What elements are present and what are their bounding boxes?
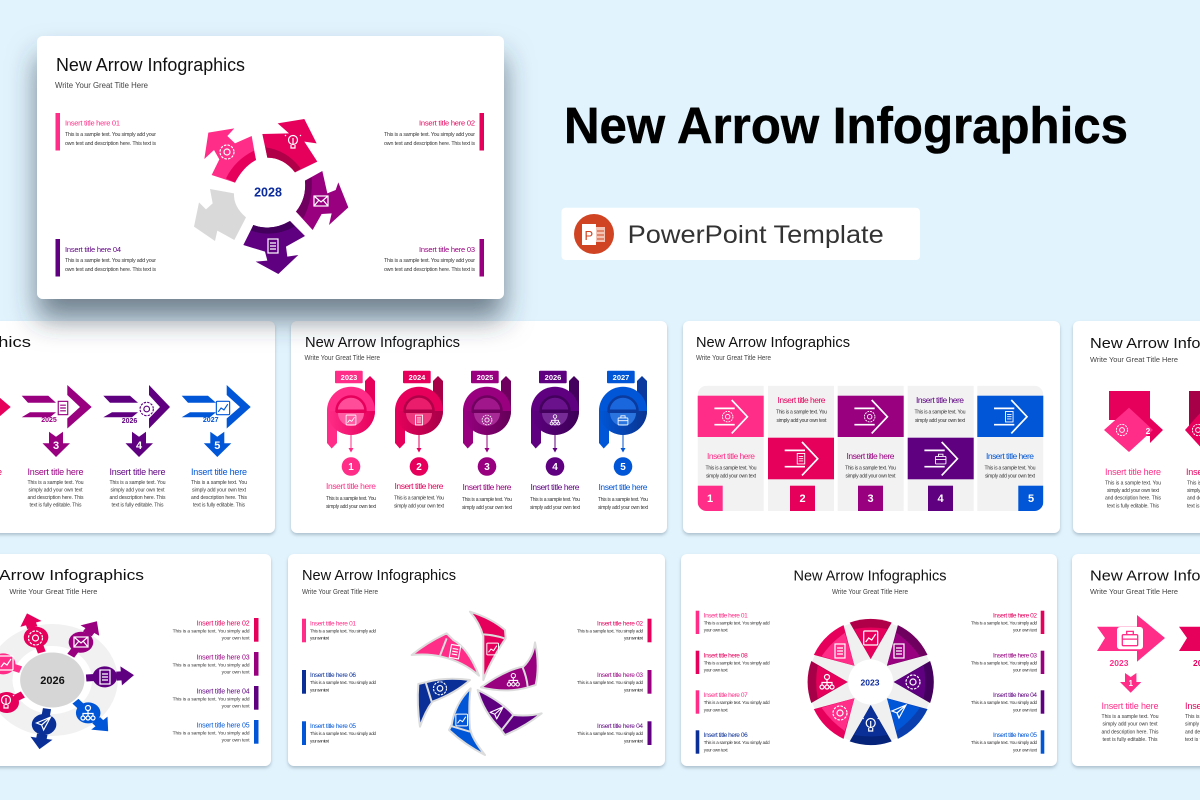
item 03: Insert title here 03 <box>419 245 475 254</box>
right items: Insert title here 03 <box>993 652 1037 659</box>
slide: ribbon arrows (cropped right) <box>1072 554 1200 766</box>
chevron arrow 2026 <box>103 385 170 428</box>
text column (cropped) <box>1186 467 1200 509</box>
grid text 5: This is a sample text. You <box>984 466 1036 472</box>
left items: This is a sample text. You simply add <box>704 660 770 665</box>
loop step 5: simply add your own text <box>598 505 649 511</box>
item 02: own text and description here. This text is <box>384 141 475 147</box>
down arrow 1: 1 <box>1128 679 1133 688</box>
loop step 3: 2025 <box>477 373 493 382</box>
grid text 4 <box>914 395 966 424</box>
loop step 2: Insert title here <box>394 481 444 491</box>
item 02 <box>173 618 258 642</box>
left items: Insert title here 05 <box>310 723 356 730</box>
block number arrow 3 <box>42 432 70 457</box>
grid text 1: Insert title here <box>707 451 755 461</box>
cycle diagram <box>194 119 348 274</box>
cycle icons <box>220 135 328 253</box>
block number arrow 3: 3 <box>53 440 59 452</box>
text column 3: This is a sample text. You <box>28 480 84 486</box>
item 04 <box>56 239 156 276</box>
item 01: This is a sample text. You simply add your <box>65 132 156 138</box>
item 05 <box>173 720 258 744</box>
text column: Insert title here <box>1105 467 1161 477</box>
text column: simply add your own text <box>1107 488 1160 494</box>
down arrow 1 <box>1120 673 1141 693</box>
center year: 2028 <box>254 186 282 200</box>
segment upper left <box>811 623 869 681</box>
loop step 2: This is a sample text. You <box>394 496 444 502</box>
right items: your own text <box>624 687 644 692</box>
loop step 1: This is a sample text. You <box>326 496 376 502</box>
arrow pink <box>204 128 256 183</box>
right items: This is a sample text. You simply add <box>971 700 1037 705</box>
loop step 5 <box>598 371 649 511</box>
slide title: New Arrow Infographics <box>696 334 850 351</box>
loop step 3: Insert title here <box>462 482 512 492</box>
grid numbers <box>707 493 1034 505</box>
text column 5: This is a sample text. You <box>191 480 247 486</box>
grid text 5: Insert title here <box>986 451 1034 461</box>
text column 5 <box>191 467 248 509</box>
text column 3 <box>28 467 84 509</box>
radial icons <box>0 631 110 730</box>
grid numbers: 5 <box>1028 493 1034 505</box>
grid numbers: 4 <box>937 493 944 505</box>
left items: This is a sample text. You simply add <box>310 731 376 736</box>
segment left <box>808 661 848 703</box>
right items: your own text <box>624 636 644 641</box>
arrow dark purple <box>243 221 305 274</box>
right items: your own text <box>1013 668 1038 673</box>
grid text 1: simply add your own text <box>706 474 757 480</box>
grid text 3: This is a sample text. You <box>845 466 896 472</box>
arrow crimson <box>262 119 317 172</box>
slide: pinwheel arrows <box>288 554 665 766</box>
left items: your own text <box>310 738 330 743</box>
main slide: cycle arrows 2028 <box>37 36 504 299</box>
text column 5: text is fully editable. This <box>193 503 246 509</box>
text column 3: and description here. This <box>28 495 84 501</box>
arrow tile 5 <box>977 396 1043 437</box>
blade crimson <box>470 612 506 680</box>
blade pink <box>412 633 479 676</box>
loop step 4 <box>530 371 581 511</box>
left items: your own text <box>704 707 728 712</box>
slide: radial arrows 2026 (cropped left) <box>0 554 271 766</box>
segment right <box>894 661 934 703</box>
item 01: own text and description here. This text is <box>65 141 156 147</box>
item 03: your own text <box>222 670 250 676</box>
grid text 3: Insert title here <box>846 451 895 461</box>
right items: This is a sample text. You simply add <box>577 731 643 736</box>
arrow tile 2 <box>768 438 834 479</box>
text column (cropped) <box>1185 701 1200 743</box>
block number arrow 4 <box>126 432 153 457</box>
loop step 1: Insert title here <box>326 481 376 491</box>
block number arrow 4: 4 <box>136 440 143 452</box>
text column 3: simply add your own text <box>28 488 83 494</box>
text column 4: and description here. This <box>110 495 166 501</box>
arrow tile 4 <box>908 438 974 479</box>
item 04: Insert title here 04 <box>197 688 250 695</box>
star wheel <box>808 619 934 745</box>
loop step 2: 2 <box>416 462 422 473</box>
right items: This is a sample text. You simply add <box>971 660 1037 665</box>
right items: This is a sample text. You simply add <box>971 740 1037 745</box>
loop step 2 <box>394 371 445 510</box>
chevron arrow 2027 <box>182 385 251 428</box>
left items <box>696 611 770 754</box>
left items: Insert title here 06 <box>310 672 356 679</box>
icon: PowerPoint <box>574 214 614 254</box>
right items <box>577 619 652 745</box>
right items: your own text <box>1013 628 1038 633</box>
item 05: This is a sample text. You simply add <box>173 730 250 736</box>
text column 4: Insert title here <box>110 467 166 477</box>
chevron arrow 2026: 2026 <box>122 418 137 425</box>
blade blue <box>449 688 485 755</box>
radial arrow dark purple <box>85 665 135 688</box>
loop step 4: simply add your own text <box>530 505 581 511</box>
text column: This is a sample text. You <box>1105 480 1161 486</box>
slide subtitle: Write Your Great Title Here <box>1090 589 1178 596</box>
left items: This is a sample text. You simply add <box>704 740 770 745</box>
grid numbers: 2 <box>799 493 806 505</box>
right items: This is a sample text. You simply add <box>577 628 643 633</box>
grid text 3 <box>845 451 896 480</box>
slide subtitle: Write Your Great Title Here <box>1090 357 1178 364</box>
segment lower right <box>872 683 930 741</box>
slide subtitle: Write Your Great Title Here <box>832 589 908 596</box>
item 05: Insert title here 05 <box>197 722 250 729</box>
slide title: New Arrow Infographics <box>794 568 946 585</box>
slide title: New Arrow Infographics <box>305 334 460 351</box>
text column 3: text is fully editable. This <box>30 503 82 509</box>
loop step 4: 2026 <box>545 373 561 382</box>
right items: This is a sample text. You simply add <box>971 620 1037 625</box>
left items: This is a sample text. You simply add <box>310 628 376 633</box>
item 02: Insert title here 02 <box>197 620 250 627</box>
grid numbers: 1 <box>707 493 713 505</box>
item 03: This is a sample text. You simply add your <box>384 258 475 264</box>
grid text 1 <box>706 451 757 480</box>
loop step 2: 2024 <box>409 373 426 382</box>
slide subtitle: Write Your Great Title Here <box>696 355 771 362</box>
ribbon arrow 2024 (cropped) <box>1179 627 1200 668</box>
blade dark blue <box>418 679 470 727</box>
radial arrow blue <box>66 694 117 738</box>
item 03: This is a sample text. You simply add <box>173 662 250 668</box>
item 02: your own text <box>222 636 250 642</box>
loop step 5: This is a sample text. You <box>598 497 648 503</box>
left items: Insert title here 08 <box>704 652 748 659</box>
text column: Insert title here <box>1102 701 1158 711</box>
loop step 4: 4 <box>552 462 558 473</box>
arrow tile 1 <box>698 396 764 437</box>
loop step 3: This is a sample text. You <box>462 497 512 503</box>
grid text 1: This is a sample text. You <box>706 466 757 472</box>
loop step 4: Insert title here <box>530 482 580 492</box>
item 04 <box>173 686 258 710</box>
left items: your own text <box>310 687 330 692</box>
grid text 5: simply add your own text <box>985 474 1036 480</box>
text column 3: Insert title here <box>28 467 84 477</box>
grid numbers: 3 <box>867 493 874 505</box>
left items: This is a sample text. You simply add <box>704 620 770 625</box>
right items: your own text <box>624 738 644 743</box>
blade dark purple <box>478 690 542 735</box>
loop step 5: 2027 <box>613 373 629 382</box>
text column: and description here. This <box>1102 729 1159 735</box>
item 02: Insert title here 02 <box>419 118 475 128</box>
loop step 1: 1 <box>348 462 354 473</box>
item 01: Insert title here 01 <box>65 118 120 128</box>
text column: text is fully editable. This <box>1107 503 1160 509</box>
grid text 4: This is a sample text. You <box>914 410 966 416</box>
block number arrow 5: 5 <box>214 440 220 452</box>
left items: your own text <box>310 636 330 641</box>
item 04: your own text <box>222 704 250 710</box>
chevron arrow 2025: 2025 <box>41 417 57 424</box>
chevron arrow 2025 <box>22 385 92 428</box>
item 04: This is a sample text. You simply add your <box>65 258 156 264</box>
right items: Insert title here 02 <box>597 620 643 627</box>
slide title: New Arrow Infographics <box>56 54 245 75</box>
item 02: This is a sample text. You simply add your <box>384 132 475 138</box>
block number arrow 5 <box>204 432 231 457</box>
text column: text is fully editable. This <box>1102 737 1158 743</box>
center year: 2026 <box>40 675 65 687</box>
slide subtitle: Write Your Great Title Here <box>304 355 380 362</box>
slide: looped arrow timeline <box>291 321 667 533</box>
radial node crimson left <box>0 685 29 717</box>
grid text 2: This is a sample text. You <box>776 410 827 416</box>
loop step 3 <box>462 371 513 511</box>
text column 4 <box>110 467 166 509</box>
slide subtitle: Write Your Great Title Here <box>9 589 97 596</box>
item 04: own text and description here. This text is <box>65 267 156 273</box>
item 03 <box>384 239 484 276</box>
chevron arrow 2024 (cropped) <box>0 386 11 428</box>
text column 4: text is fully editable. This <box>112 503 164 509</box>
item 04: Insert title here 04 <box>65 245 121 254</box>
left items: Insert title here 07 <box>704 692 748 699</box>
loop step 1: 2023 <box>341 373 357 382</box>
left items: your own text <box>704 628 728 633</box>
grid text 2 <box>776 395 827 424</box>
item 05: your own text <box>222 738 250 744</box>
left items: Insert title here 01 <box>310 620 356 627</box>
left items: your own text <box>704 747 728 752</box>
loop step 1: simply add your own text <box>326 504 377 510</box>
radial node pink left <box>0 650 25 679</box>
loop step 4: This is a sample text. You <box>530 497 580 503</box>
segment bottom <box>850 705 892 745</box>
segment lower left <box>811 683 869 741</box>
text column 5: simply add your own text <box>192 488 247 494</box>
right items <box>971 611 1044 754</box>
right items: your own text <box>1013 707 1038 712</box>
item 03: Insert title here 03 <box>197 654 250 661</box>
right items: Insert title here 05 <box>993 732 1037 739</box>
right items: Insert title here 02 <box>993 612 1037 619</box>
loop step 1 <box>326 371 377 510</box>
left items <box>302 619 376 745</box>
grid text 4: Insert title here <box>916 395 964 405</box>
grid text 2: simply add your own text <box>776 418 827 424</box>
item 04: This is a sample text. You simply add <box>173 696 250 702</box>
left items: This is a sample text. You simply add <box>704 700 770 705</box>
pinwheel diagram <box>412 612 542 755</box>
text column <box>1102 701 1159 743</box>
right items: Insert title here 04 <box>993 692 1037 699</box>
ribbon arrow 2023: 2023 <box>1110 658 1129 668</box>
grid text 3: simply add your own text <box>846 474 896 480</box>
main heading: New Arrow Infographics <box>564 97 1128 154</box>
segment top <box>850 619 892 659</box>
diamond arrow 1 <box>1104 391 1163 452</box>
text column 5: and description here. This <box>191 495 248 501</box>
text column: simply add your own text <box>1102 722 1158 728</box>
radial arrow crimson <box>15 610 53 656</box>
loop step 5: Insert title here <box>598 482 648 492</box>
item 02: This is a sample text. You simply add <box>173 628 250 634</box>
right items: Insert title here 04 <box>597 723 643 730</box>
badge label: PowerPoint Template <box>628 221 884 249</box>
loop step 3: 3 <box>484 462 490 473</box>
segment upper right <box>872 623 930 681</box>
left items: your own text <box>704 668 728 673</box>
icon: PowerPoint: P <box>584 228 593 243</box>
slide: octagon star wheel <box>681 554 1057 766</box>
loop step 2: simply add your own text <box>394 504 445 510</box>
blade purple <box>481 642 538 690</box>
left items: This is a sample text. You simply add <box>310 680 376 685</box>
slide subtitle: Write Your Great Title Here <box>55 81 149 90</box>
slide: staggered arrow grid <box>683 321 1060 533</box>
text column <box>1105 467 1162 509</box>
item 02 <box>384 113 484 150</box>
slide: chevron arrows timeline (cropped left) <box>0 321 275 533</box>
text column: and description here. This <box>1105 496 1162 502</box>
arrow tile 3 <box>838 396 904 437</box>
grid background and number tiles <box>698 386 1043 511</box>
slide title: New Arrow Infographics <box>302 567 456 584</box>
grid text 5 <box>984 451 1036 480</box>
radial diagram <box>0 610 135 751</box>
diamond arrow 2 (cropped) <box>1185 391 1200 452</box>
item 03 <box>173 652 258 676</box>
chevron arrow 2027: 2027 <box>203 417 219 424</box>
loop step 5: 5 <box>620 462 626 473</box>
badge: PowerPoint Template <box>562 208 920 260</box>
item 01 <box>56 113 156 150</box>
wheel icons <box>820 631 920 731</box>
arrow purple <box>296 171 348 230</box>
arrow grey <box>194 189 246 241</box>
radial arrow dark blue <box>27 707 59 751</box>
grid text 2: Insert title here <box>778 395 826 405</box>
left items: Insert title here 06 <box>704 732 748 739</box>
text column 4: This is a sample text. You <box>110 480 166 486</box>
loop step 3: simply add your own text <box>462 505 513 511</box>
text column 5: Insert title here <box>191 467 247 477</box>
wheel center year: 2023 <box>861 678 880 688</box>
right items: your own text <box>1013 747 1038 752</box>
radial arrow purple <box>60 616 107 661</box>
slide subtitle: Write Your Great Title Here <box>302 589 378 596</box>
ribbon arrow 2023 <box>1097 615 1165 668</box>
right items: Insert title here 03 <box>597 672 643 679</box>
right items: This is a sample text. You simply add <box>577 680 643 685</box>
item 03: own text and description here. This text is <box>384 267 475 273</box>
slide: diamond arrows (cropped right) <box>1073 321 1200 533</box>
text column: This is a sample text. You <box>1102 714 1159 720</box>
text column 4: simply add your own text <box>110 488 165 494</box>
diamond arrow 1: 2 <box>1146 426 1151 436</box>
grid text 4: simply add your own text <box>915 418 966 424</box>
left items: Insert title here 01 <box>704 612 748 619</box>
